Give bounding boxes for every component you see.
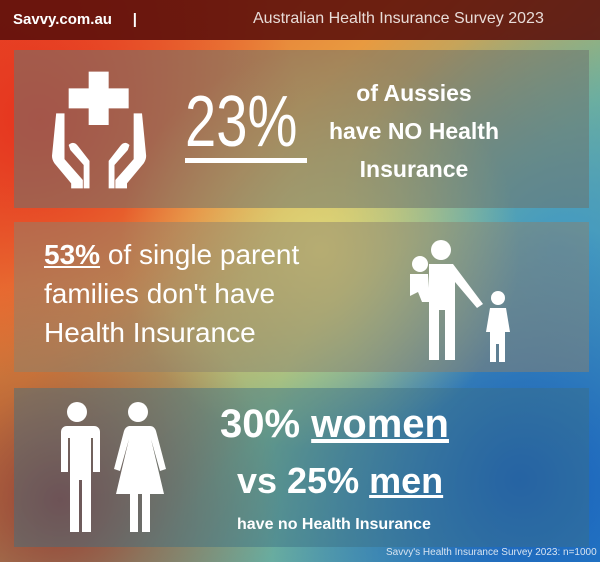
panel: 23% <box>14 50 589 208</box>
text: of Aussies <box>329 80 499 182</box>
text: of Aussies: Insurance <box>360 156 468 182</box>
brand: Savvy.com.au | <box>13 11 137 28</box>
text: 53%: 53% of single parent <box>44 239 299 270</box>
panel: gender: vs 25% men <box>237 460 443 501</box>
text: have no Health Insurance: have no Health Insurance <box>237 516 431 533</box>
icon: parent with children <box>410 240 510 362</box>
big stat 23%: 23% <box>185 82 297 162</box>
stat: women vs men: 30% women <box>220 402 449 446</box>
text: of Aussies: have NO Health <box>329 118 499 144</box>
icon: man and woman <box>61 402 166 532</box>
panel: single parents <box>14 222 589 372</box>
header title: Australian Health Insurance Survey 2023 <box>253 10 544 27</box>
text: of Aussies: of Aussies <box>356 80 472 106</box>
text: 53%: Health Insurance <box>44 317 256 348</box>
source note: Savvy's Health Insurance Survey 2023: n=1000 <box>386 547 597 558</box>
header bar <box>0 0 600 40</box>
text: 53% <box>44 239 300 348</box>
panel: gender <box>14 388 589 547</box>
icon: hands with cross <box>52 72 146 188</box>
text: 53%: families don't have <box>44 278 275 309</box>
